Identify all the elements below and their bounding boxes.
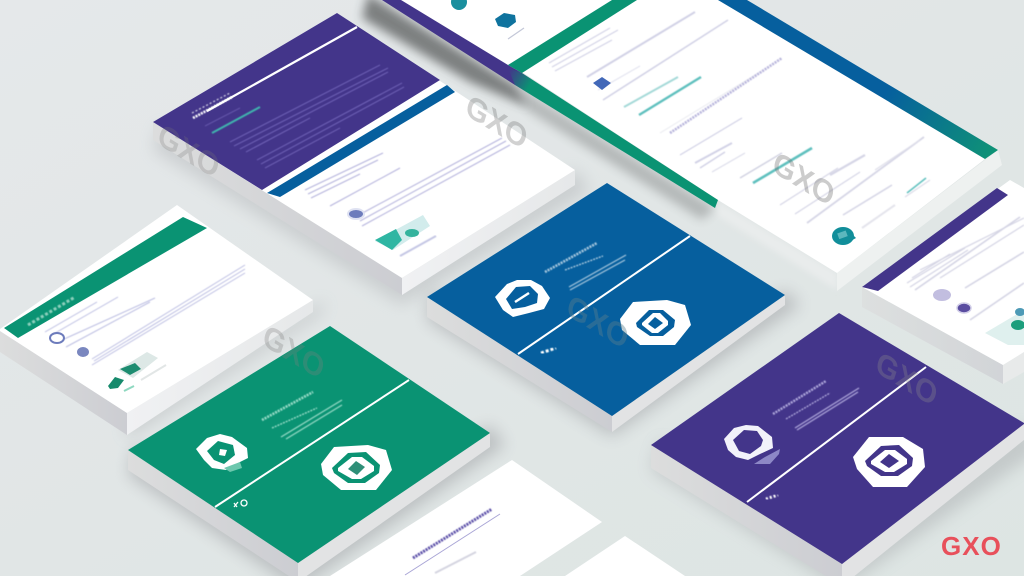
- white divider: [215, 380, 409, 507]
- text lines lower: [780, 137, 930, 228]
- card: top-right large document: [362, 0, 1002, 291]
- watermark: GXO on top-left card edge: GXO: [154, 116, 224, 185]
- purple band: [382, 0, 522, 85]
- big octagon icon: [321, 445, 392, 490]
- blue icons: [50, 333, 89, 357]
- small mark: [766, 495, 778, 499]
- card text: [262, 392, 342, 439]
- watermark: GXO on blue card: GXO: [563, 287, 633, 356]
- white divider: [518, 236, 690, 354]
- teal badge top left: [451, 0, 467, 10]
- green band top: [508, 0, 637, 73]
- card text: [773, 381, 859, 430]
- card: left green header document: [0, 205, 326, 438]
- card: far-right purple header document: [862, 180, 1024, 384]
- text lines upper: [549, 12, 782, 172]
- card: bottom white document: [330, 460, 602, 576]
- card: green business card: [128, 326, 505, 576]
- blue square icon: [593, 77, 611, 90]
- small icon: [196, 434, 248, 472]
- header heading text: [192, 93, 232, 118]
- document title: [413, 509, 492, 558]
- teal highlight bars lower: [740, 148, 926, 193]
- small blue icon: [348, 209, 364, 219]
- text lines: [907, 217, 1024, 320]
- teal illustration: [375, 215, 430, 250]
- small icon: [724, 425, 780, 464]
- card text: [545, 243, 626, 290]
- watermark: GXO on large document: GXO: [769, 144, 839, 213]
- purple band: [862, 188, 1008, 291]
- band text: [28, 297, 75, 325]
- body text lines on white: [305, 138, 510, 226]
- illustration: [985, 308, 1024, 345]
- blue badge: [495, 13, 524, 39]
- caption text: [435, 552, 476, 573]
- small icon: [495, 280, 550, 317]
- big octagon icon: [853, 437, 925, 487]
- logo: red GXO mark: GXO: [941, 531, 1002, 561]
- text lines: [45, 265, 245, 365]
- small mark: [541, 348, 556, 353]
- caption line: [400, 236, 436, 256]
- watermark: GXO near green card: GXO: [259, 317, 329, 386]
- green band left: [508, 68, 718, 208]
- white divider: [747, 367, 926, 502]
- card: bottom-right white document corner: [565, 536, 685, 576]
- purple header panel: [153, 13, 440, 190]
- watermark: GXO on top-left card white area: GXO: [462, 87, 532, 156]
- card: blue business card: [427, 183, 800, 436]
- white rule on header: [207, 27, 357, 111]
- green band: [4, 217, 207, 338]
- title rule: [405, 514, 500, 575]
- big octagon icon: [620, 300, 691, 345]
- watermark: GXO on purple card: GXO: [872, 344, 942, 413]
- teal highlight bars upper: [624, 77, 701, 115]
- small mark: [234, 500, 247, 507]
- card: purple business card: [651, 313, 1024, 576]
- header body text lines: [205, 65, 404, 168]
- card: top-left purple and white document: [153, 13, 590, 305]
- purple circle icons: [933, 289, 971, 313]
- teal badge bottom: [832, 227, 856, 245]
- blue band right: [718, 0, 998, 159]
- blue band: [267, 85, 455, 197]
- green illustration: [108, 352, 166, 391]
